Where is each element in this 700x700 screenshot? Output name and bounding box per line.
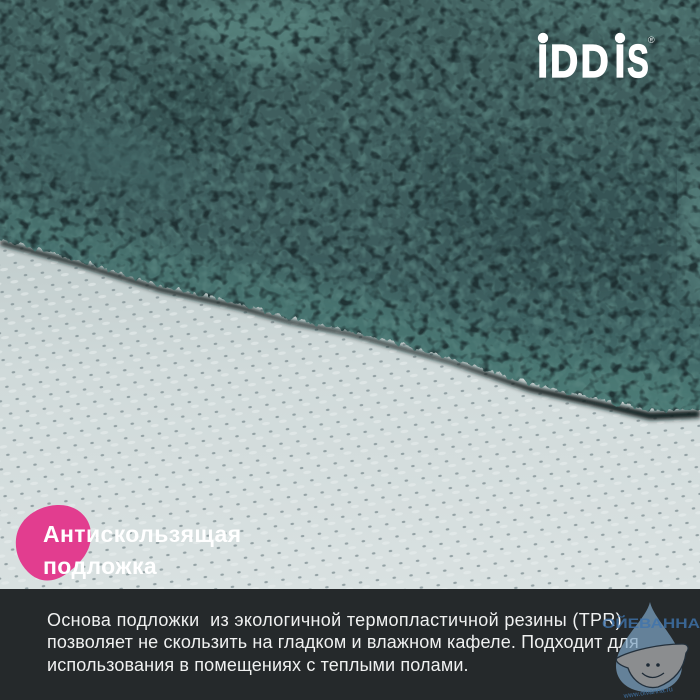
site url: www.oivanna.ru <box>622 686 673 700</box>
tub face <box>642 663 664 678</box>
registered mark: ® <box>648 35 655 45</box>
body text: позволяет не скользить на гладком и влажном кафеле. Подходит для <box>47 632 639 652</box>
darker dense area <box>142 74 230 139</box>
site name: ОЙЕВАННА <box>602 614 700 631</box>
white knitted backing <box>0 230 700 590</box>
lighter right edge <box>680 160 700 320</box>
logo dots <box>538 33 625 43</box>
green mat pile <box>0 0 700 430</box>
lighter fluffy patch, top <box>180 0 340 70</box>
shadow under the mat <box>0 240 700 420</box>
tub <box>616 644 688 688</box>
watermark: bath in a water drop <box>602 602 700 700</box>
logo: IDDIS: S <box>627 36 649 87</box>
heading: anti-slip backing: подложка <box>43 553 157 579</box>
body text: использования в помещениях с теплыми полами. <box>47 655 469 675</box>
badge: pink circle <box>16 505 92 580</box>
heading: anti-slip backing: Антискользящая <box>43 521 241 547</box>
body text: Основа подложки из экологичной термопластичной резины (TPR) <box>47 610 622 630</box>
logo: IDDIS: IDDI <box>537 36 625 88</box>
smooth patch, left <box>34 122 182 204</box>
footer panel background <box>0 589 700 700</box>
lighter front edge <box>0 202 690 410</box>
heading: anti-slip backing <box>43 521 241 579</box>
water drop <box>616 602 682 692</box>
body text <box>47 610 639 675</box>
